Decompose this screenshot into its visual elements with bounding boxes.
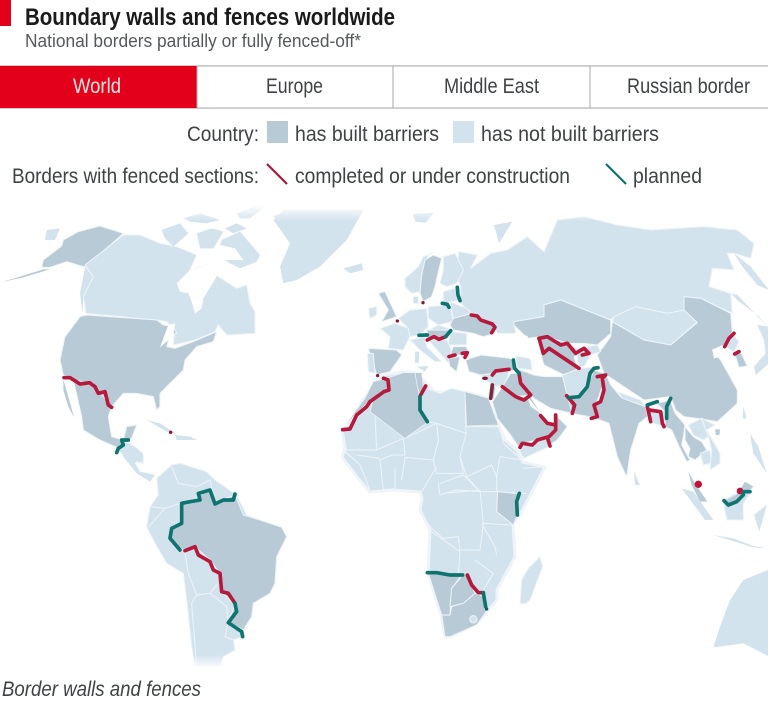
fence lines: planned <box>117 287 750 637</box>
United States <box>60 315 217 410</box>
tab: Russian border: Russian border <box>627 75 750 98</box>
Kazakhstan <box>514 300 611 345</box>
Arabia and Iran <box>519 438 550 458</box>
Russia and Asia <box>412 213 768 477</box>
Turkey <box>466 355 516 375</box>
fence lines: completed or under construction <box>64 301 743 603</box>
Europe <box>367 252 495 375</box>
Central Asia <box>539 337 582 367</box>
tab: Middle East: Middle East <box>444 75 539 98</box>
tab: Russian border <box>590 66 768 108</box>
subtitle: National borders partially or fully fenced-off* <box>25 31 361 51</box>
Caucasus <box>516 356 532 370</box>
China <box>597 297 737 422</box>
legend: border lines: completed or under construction <box>295 165 570 188</box>
tab: Europe: Europe <box>266 75 323 98</box>
India <box>594 373 647 477</box>
tab: Europe <box>197 66 393 108</box>
Australia <box>713 563 768 673</box>
legend: border lines: planned <box>633 165 702 188</box>
legend: country colours: has not built barriers <box>481 123 659 146</box>
tab: Middle East <box>393 66 590 108</box>
legend: country colours <box>187 121 659 146</box>
Mongolia <box>612 307 697 345</box>
legend: country colours: has built barriers <box>295 123 439 146</box>
Canada and Arctic islands <box>83 205 280 345</box>
world map <box>0 205 768 673</box>
legend: border lines <box>12 164 702 188</box>
North America <box>2 210 363 463</box>
legend: border lines: Borders with fenced sections: <box>12 165 259 188</box>
Africa <box>342 372 768 673</box>
tab: World <box>0 66 197 108</box>
tab: World: World <box>73 75 121 98</box>
red corner marker <box>0 0 11 26</box>
map edge fades <box>0 205 768 221</box>
Mexico <box>73 380 137 447</box>
South America <box>120 447 287 667</box>
title: Boundary walls and fences worldwide <box>25 4 395 31</box>
legend: country colours: Country: <box>187 123 259 146</box>
Greenland <box>273 210 363 283</box>
caption: Border walls and fences <box>2 678 201 701</box>
Korea <box>725 333 739 352</box>
South-East Asia <box>634 400 767 520</box>
tab bar <box>0 66 768 108</box>
